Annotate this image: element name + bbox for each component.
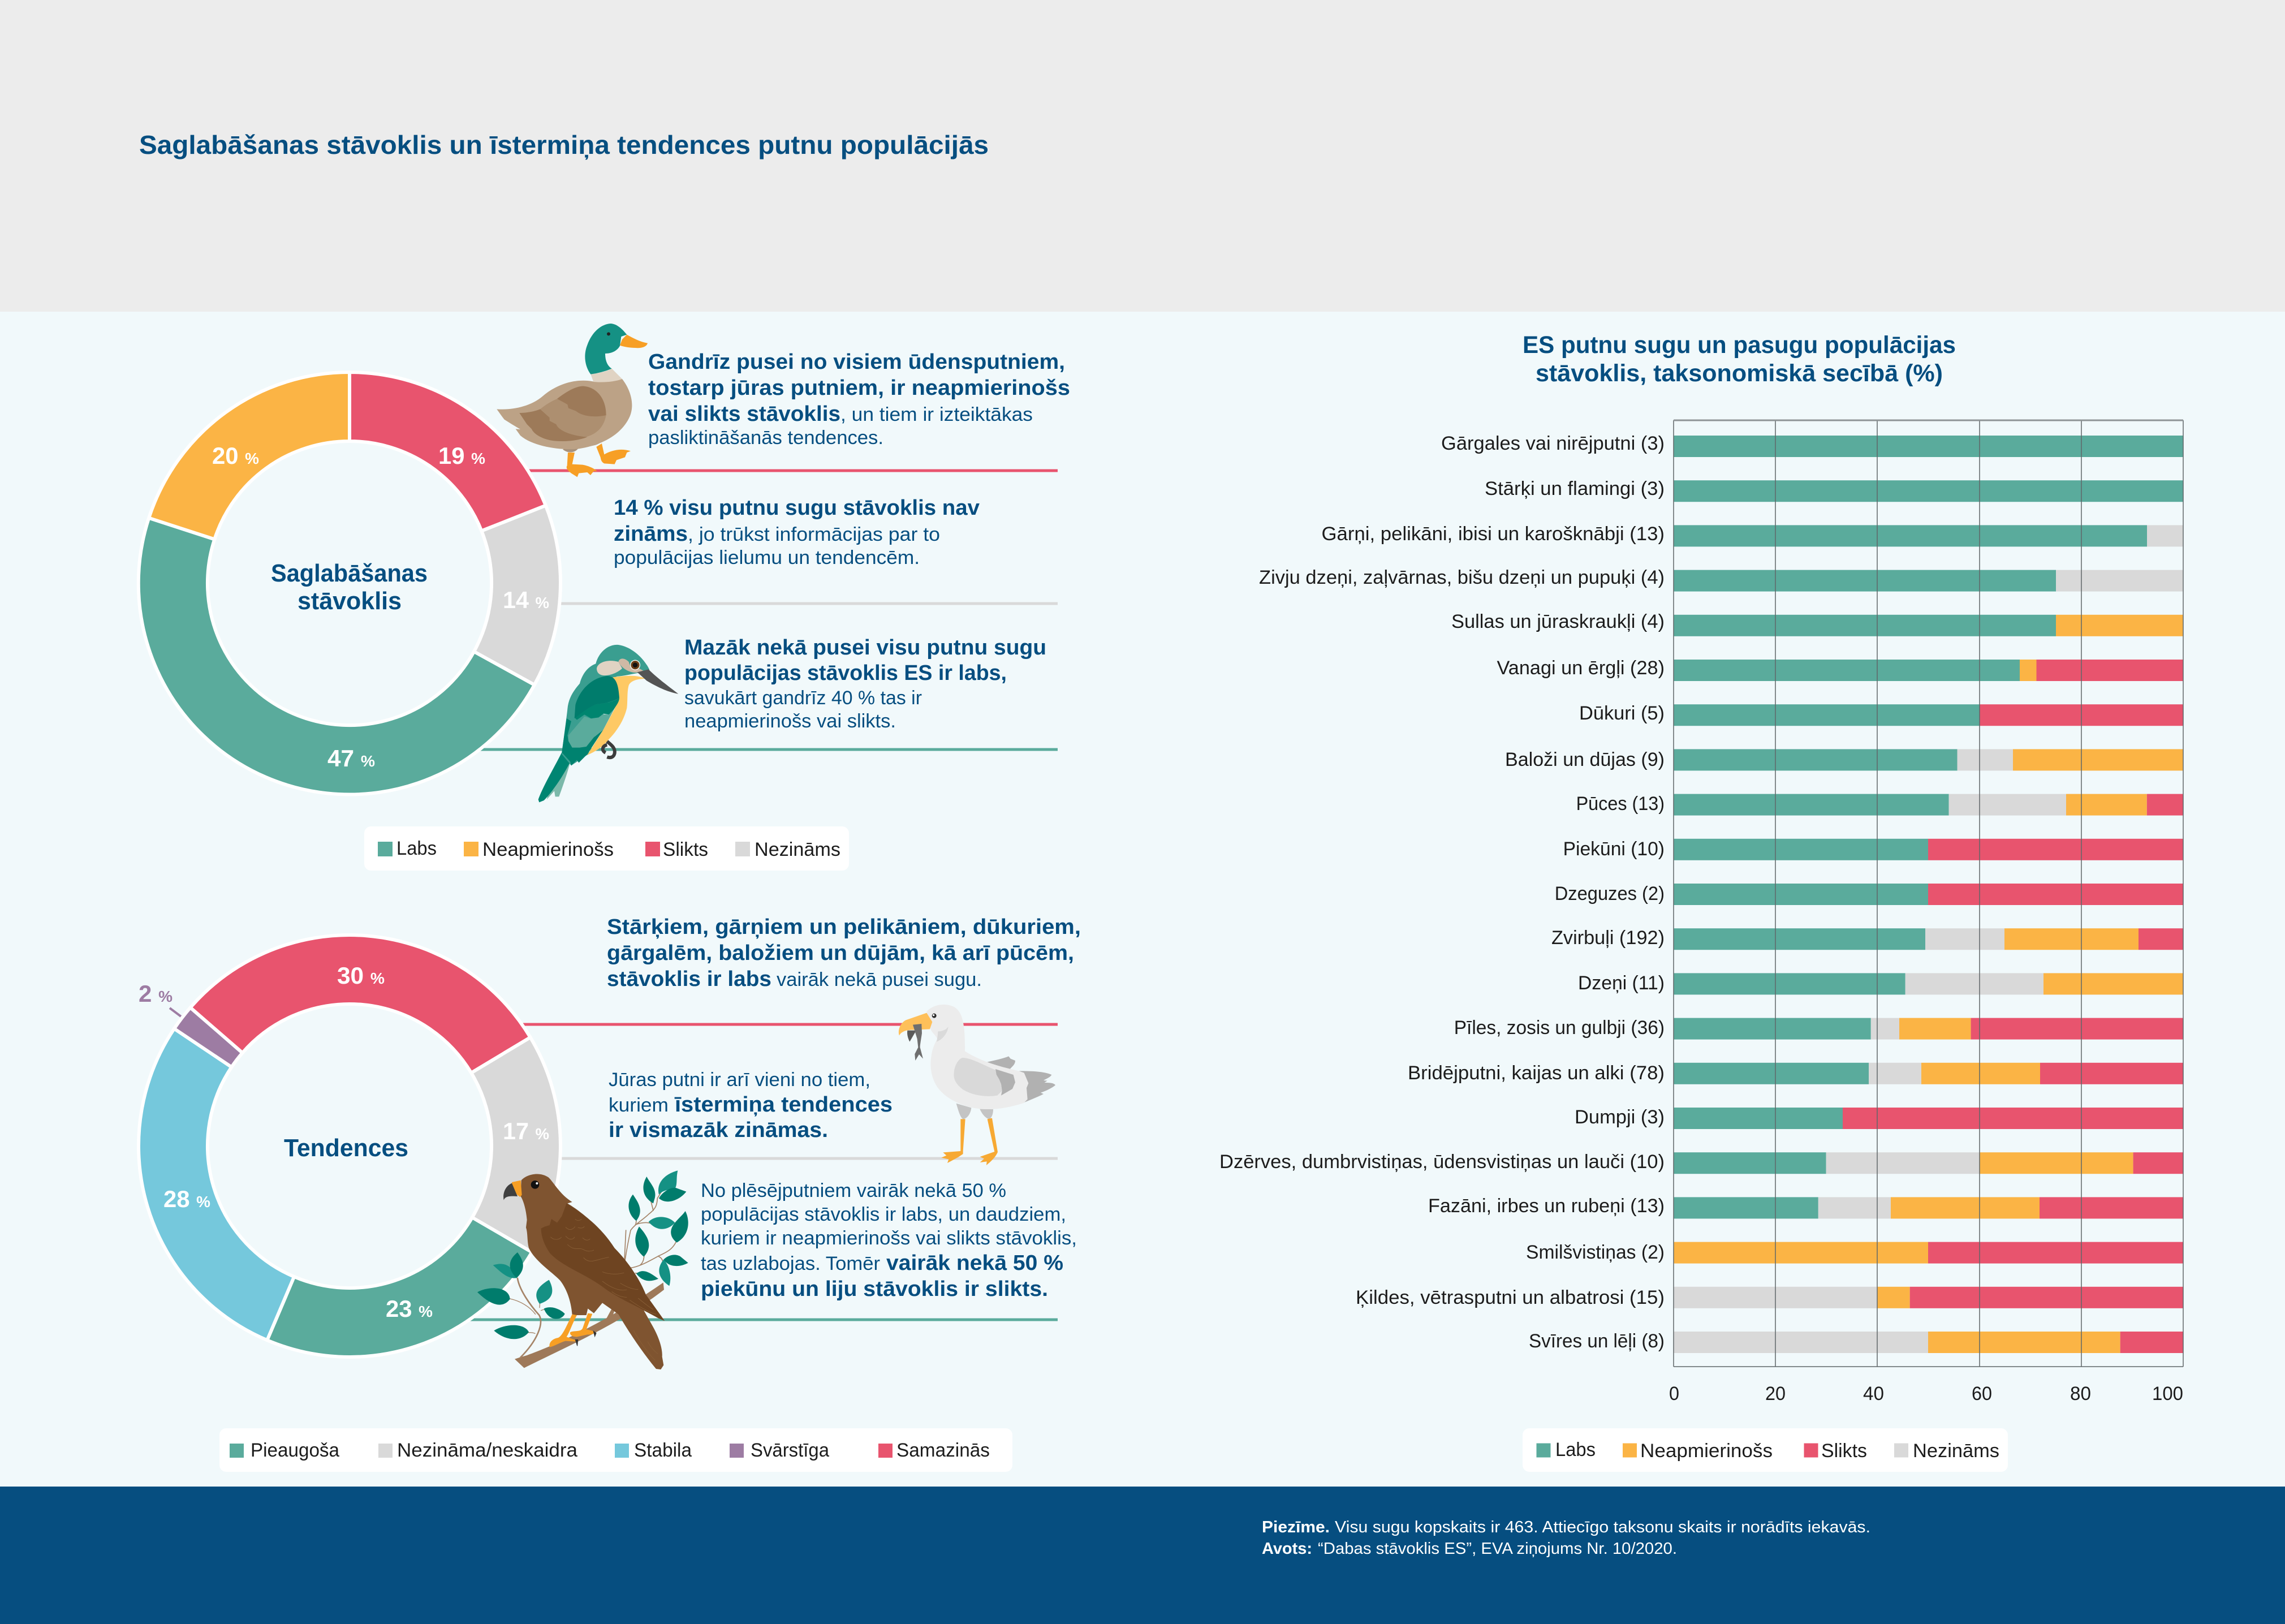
category labels: Zvirbuļi (192) <box>1551 927 1665 949</box>
text block: good status: savukārt gandrīz 40 % tas ir <box>684 687 922 709</box>
category labels: Dzeņi (11) <box>1578 972 1665 994</box>
legend: bar chart: Slikts <box>1821 1440 1867 1462</box>
donut centre label: stāvoklis <box>298 587 402 615</box>
axis tick labels: 0 <box>1669 1383 1679 1405</box>
category labels: Pīles, zosis un gulbji (36) <box>1454 1017 1665 1039</box>
category labels: Vanagi un ērgļi (28) <box>1497 657 1665 679</box>
axis tick labels: 80 <box>2070 1383 2091 1405</box>
axis tick labels <box>1669 1383 2183 1405</box>
legend: bar chart: Nezināms <box>1913 1440 1999 1462</box>
legend: conservation status <box>364 826 849 871</box>
panel: trends donut with callouts <box>139 915 1081 1472</box>
legend: conservation status: Neapmierinošs <box>482 839 614 860</box>
donut value labels <box>212 442 549 772</box>
text block: good status: populācijas stāvoklis ES ir labs, <box>684 661 1007 685</box>
donut centre label: Saglabāšanas <box>271 559 428 587</box>
donut value labels: 20 % <box>212 442 259 469</box>
legend: trends: Nezināma/neskaidra <box>397 1440 577 1461</box>
panel: conservation status donut with callouts <box>139 324 1070 871</box>
category labels: Ķildes, vētrasputni un albatrosi (15) <box>1356 1287 1665 1308</box>
category labels: Dzeguzes (2) <box>1555 883 1665 904</box>
text block: storks and herons: gārgalēm, baložiem un dūjām, kā arī pūcēm, <box>607 941 1074 965</box>
leader line for 2 % <box>170 1008 186 1020</box>
category labels: Fazāni, irbes un rubeņi (13) <box>1428 1195 1665 1217</box>
text block: water birds <box>648 350 1070 449</box>
donut value labels: 47 % <box>327 745 375 772</box>
chart heading: ES putnu sugu un pasugu populācijas <box>1523 331 1956 359</box>
text block: birds of prey: vairāk nekā 50 % <box>886 1251 1063 1275</box>
legend: trends <box>219 1428 1012 1472</box>
category labels: Sullas un jūraskraukļi (4) <box>1451 611 1665 632</box>
category labels: Gārgales vai nirējputni (3) <box>1441 433 1665 454</box>
donut centre label: Tendences <box>284 1134 408 1162</box>
text block: birds of prey <box>701 1180 1077 1301</box>
donut value labels: 17 % <box>503 1118 549 1144</box>
text block: birds of prey: populācijas stāvoklis ir labs, un daudziem, <box>701 1204 1066 1225</box>
chart heading: stāvoklis, taksonomiskā secībā (%) <box>1536 360 1943 387</box>
text block: water birds: , un tiem ir izteiktākas <box>840 404 1033 425</box>
text block: storks and herons: Stārķiem, gārņiem un pelikāniem, dūkuriem, <box>607 915 1081 939</box>
axis tick labels: 40 <box>1863 1383 1884 1405</box>
category labels: Bridējputni, kaijas un alki (78) <box>1408 1062 1665 1084</box>
text block: unknown status: 14 % visu putnu sugu stāvoklis nav <box>614 496 980 520</box>
category labels: Svīres un lēļi (8) <box>1529 1330 1665 1352</box>
legend: trends: Samazinās <box>896 1440 990 1461</box>
note and source <box>1262 1518 1870 1558</box>
donut value labels <box>139 962 549 1322</box>
category labels: Piekūni (10) <box>1563 838 1665 860</box>
legend: trends: Svārstīga <box>751 1440 829 1461</box>
icon: duck <box>497 324 648 477</box>
legend: bar chart: Labs <box>1555 1439 1596 1461</box>
text block: water birds: vai slikts stāvoklis <box>648 402 840 426</box>
donut value labels: 2 % <box>139 980 173 1007</box>
donut chart: trends <box>139 935 561 1357</box>
text block: good status: neapmierinošs vai slikts. <box>684 710 896 732</box>
text block: storks and herons <box>607 915 1081 991</box>
text block: good status <box>684 636 1046 732</box>
category labels: Smilšvistiņas (2) <box>1526 1242 1665 1263</box>
legend: conservation status: Nezināms <box>755 839 840 860</box>
text block: seabirds: ir vismazāk zināmas. <box>609 1118 828 1142</box>
category labels: Baloži un dūjas (9) <box>1505 749 1665 770</box>
donut value labels: 19 % <box>438 442 485 469</box>
legend: bar chart <box>1523 1428 2008 1472</box>
axis tick labels: 20 <box>1765 1383 1786 1405</box>
text block: good status: Mazāk nekā pusei visu putnu sugu <box>684 636 1046 660</box>
callout lines <box>464 469 1058 751</box>
text block: water birds: pasliktināšanās tendences. <box>648 427 883 449</box>
footer band <box>0 1487 2285 1624</box>
donut value labels: 30 % <box>337 962 385 989</box>
callout lines <box>452 1023 1058 1321</box>
text block: birds of prey: tas uzlabojas. Tomēr <box>701 1253 880 1274</box>
category labels: Gārņi, pelikāni, ibisi un karošknābji (13) <box>1321 523 1665 545</box>
text block: seabirds: Jūras putni ir arī vieni no tiem, <box>609 1069 870 1091</box>
text block: water birds: Gandrīz pusei no visiem ūdensputniem, <box>648 350 1065 374</box>
axis tick labels: 60 <box>1972 1383 1992 1405</box>
stacked bars <box>1674 436 2183 1353</box>
text block: unknown status <box>614 496 980 568</box>
text block: water birds: tostarp jūras putniem, ir neapmierinošs <box>648 376 1070 400</box>
chart heading <box>1523 331 1956 387</box>
text block: birds of prey: No plēsējputniem vairāk nekā 50 % <box>701 1180 1006 1201</box>
donut value labels: 23 % <box>386 1295 433 1322</box>
category labels <box>1219 433 1665 1352</box>
category labels: Stārķi un flamingi (3) <box>1485 478 1665 499</box>
icon: kingfisher <box>538 645 678 802</box>
icon: eagle on branch <box>477 1170 688 1369</box>
donut value labels: 28 % <box>163 1186 210 1212</box>
category labels: Pūces (13) <box>1576 793 1665 815</box>
text block: seabirds: īstermiņa tendences <box>674 1093 893 1117</box>
axis tick labels: 100 <box>2152 1383 2183 1405</box>
text block: birds of prey: piekūnu un liju stāvoklis ir slikts. <box>701 1277 1048 1301</box>
legend: bar chart: Neapmierinošs <box>1640 1440 1773 1462</box>
category labels: Dūkuri (5) <box>1579 703 1665 724</box>
text block: birds of prey: kuriem ir neapmierinošs vai slikts stāvoklis, <box>701 1227 1077 1249</box>
header band <box>0 0 2285 312</box>
category labels: Dumpji (3) <box>1575 1106 1665 1128</box>
donut centre label <box>271 559 428 615</box>
icon: seagull <box>899 1005 1055 1165</box>
text block: seabirds <box>609 1069 893 1142</box>
text block: storks and herons: vairāk nekā pusei sugu. <box>777 969 982 990</box>
text block: unknown status: populācijas lielumu un tendencēm. <box>614 547 920 568</box>
text block: unknown status: , jo trūkst informācijas par to <box>688 524 940 545</box>
note and source: “Dabas stāvoklis ES”, EVA ziņojums Nr. 10/2020. <box>1318 1540 1677 1558</box>
legend: conservation status: Labs <box>396 838 437 859</box>
category labels: Dzērves, dumbrvistiņas, ūdensvistiņas un lauči (10) <box>1219 1151 1665 1173</box>
chart axes and gridlines <box>1674 420 2183 1367</box>
note and source: Visu sugu kopskaits ir 463. Attiecīgo taksonu skaits ir norādīts iekavās. <box>1335 1518 1870 1536</box>
legend: conservation status: Slikts <box>663 839 708 860</box>
panel: taxonomic bar chart <box>1219 331 2183 1472</box>
note and source: Piezīme. <box>1262 1518 1330 1536</box>
legend: trends: Stabila <box>634 1440 692 1461</box>
text block: unknown status: zināms <box>614 522 688 546</box>
text block: seabirds: kuriem <box>609 1095 669 1116</box>
note and source: Avots: <box>1262 1540 1312 1558</box>
text block: storks and herons: stāvoklis ir labs <box>607 967 771 991</box>
donut value labels: 14 % <box>503 587 549 613</box>
title: Saglabāšanas stāvoklis un īstermiņa tendences putnu populācijās <box>139 130 989 160</box>
legend: trends: Pieaugoša <box>251 1440 339 1461</box>
donut chart: conservation status <box>139 372 561 794</box>
category labels: Zivju dzeņi, zaļvārnas, bišu dzeņi un pupuķi (4) <box>1259 567 1665 588</box>
